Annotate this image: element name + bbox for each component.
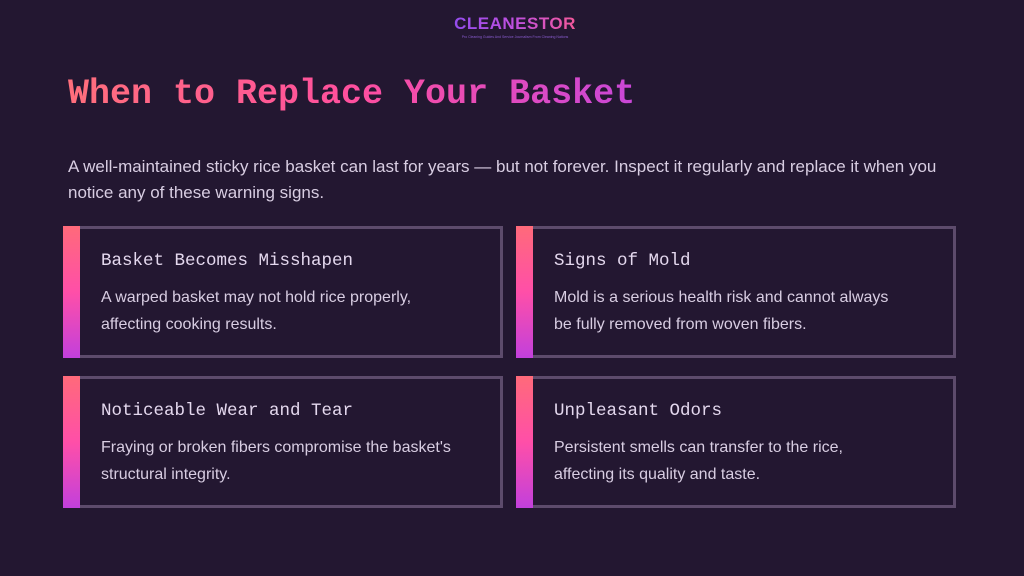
- card: misshapen: A warped basket may not hold rice properly,: [101, 289, 411, 306]
- card: mold: Mold is a serious health risk and cannot always: [554, 289, 888, 306]
- card: wear: structural integrity.: [101, 466, 231, 483]
- card: mold: be fully removed from woven fibers.: [554, 316, 807, 333]
- title: When to Replace Your Basket: [68, 74, 635, 114]
- intro text: A well-maintained sticky rice basket can last for years — but not forever. Inspect it regularly and replace it when you: [68, 157, 936, 176]
- card: odors: affecting its quality and taste.: [554, 466, 760, 483]
- card: wear: [63, 376, 503, 508]
- card: odors: Persistent smells can transfer to the rice,: [554, 439, 843, 456]
- card: mold: [516, 226, 956, 358]
- intro text: notice any of these warning signs.: [68, 183, 324, 202]
- card: misshapen: Basket Becomes Misshapen: [101, 251, 353, 271]
- logo: Pro Cleaning Guides And Service Journalism From Cleaning Nations: [462, 35, 568, 39]
- card: mold: Signs of Mold: [554, 251, 691, 271]
- card: odors: Unpleasant Odors: [554, 401, 722, 421]
- logo: CLEANESTOR: [454, 14, 576, 33]
- card: odors: [516, 376, 956, 508]
- card: wear: Noticeable Wear and Tear: [101, 401, 353, 421]
- card: wear: Fraying or broken fibers compromise the basket's: [101, 439, 451, 456]
- card: misshapen: affecting cooking results.: [101, 316, 277, 333]
- card: misshapen: [63, 226, 503, 358]
- intro text: [68, 157, 936, 202]
